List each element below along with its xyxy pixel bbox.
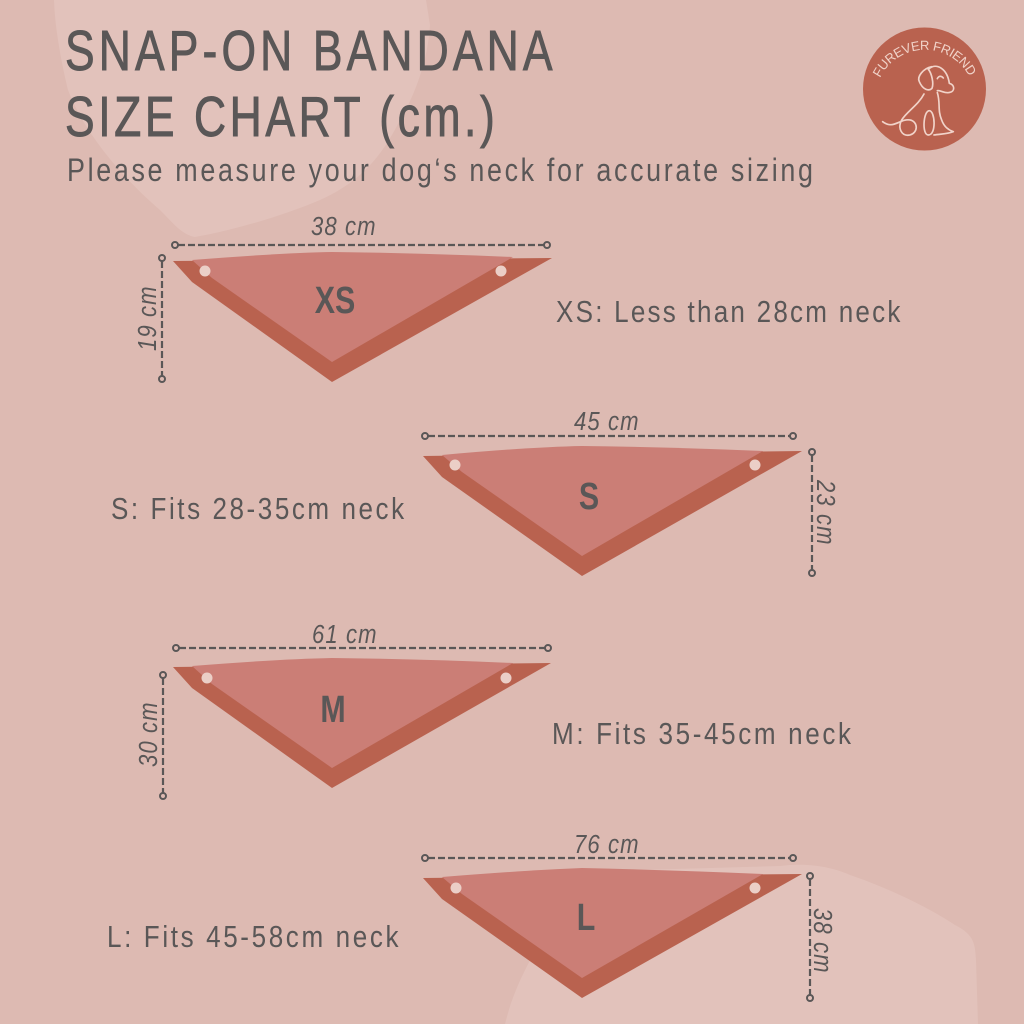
width dimension XS	[172, 212, 550, 248]
label S: S: Fits 28-35cm neck	[111, 492, 405, 527]
height dimension M	[134, 672, 166, 799]
height dimension XS	[133, 255, 165, 382]
title	[65, 19, 552, 148]
background blob: bottom	[505, 865, 978, 1024]
width dimension L: 76 cm	[574, 830, 639, 859]
bandana L: L	[577, 897, 595, 939]
title: SNAP-ON BANDANA	[65, 19, 552, 82]
width dimension S: 45 cm	[574, 407, 639, 436]
height dimension S: 23 cm	[811, 479, 840, 545]
label L: L: Fits 45-58cm neck	[107, 920, 399, 955]
bandana L	[423, 868, 802, 998]
size S	[111, 407, 840, 576]
bandana M: M	[320, 689, 346, 731]
height dimension S	[809, 449, 840, 576]
height dimension M: 30 cm	[134, 702, 163, 767]
bandana XS	[173, 252, 552, 382]
width dimension M	[173, 620, 551, 651]
label M: M: Fits 35-45cm neck	[552, 717, 852, 752]
height dimension L: 38 cm	[808, 908, 837, 973]
bandana S: S	[579, 476, 599, 518]
icon: dog line drawing	[883, 66, 954, 135]
width dimension S	[422, 407, 796, 439]
subtitle: Please measure your dog‘s neck for accurate sizing	[67, 153, 813, 189]
bandana S	[423, 446, 802, 576]
label XS: XS: Less than 28cm neck	[556, 295, 901, 330]
height dimension XS: 19 cm	[133, 286, 162, 351]
logo badge: Furever Friend: FUREVER FRIEND	[872, 40, 975, 78]
logo badge: Furever Friend	[863, 28, 986, 150]
width dimension XS: 38 cm	[311, 212, 376, 241]
bandana XS: XS	[315, 280, 355, 322]
size M	[134, 620, 852, 799]
size L	[107, 830, 837, 1001]
height dimension L	[807, 873, 837, 1001]
background blob: top	[54, 0, 430, 237]
bandana M	[173, 658, 551, 788]
size XS	[133, 212, 901, 382]
width dimension L	[422, 830, 796, 861]
width dimension M: 61 cm	[312, 620, 377, 649]
title: SIZE CHART (cm.)	[65, 85, 495, 148]
